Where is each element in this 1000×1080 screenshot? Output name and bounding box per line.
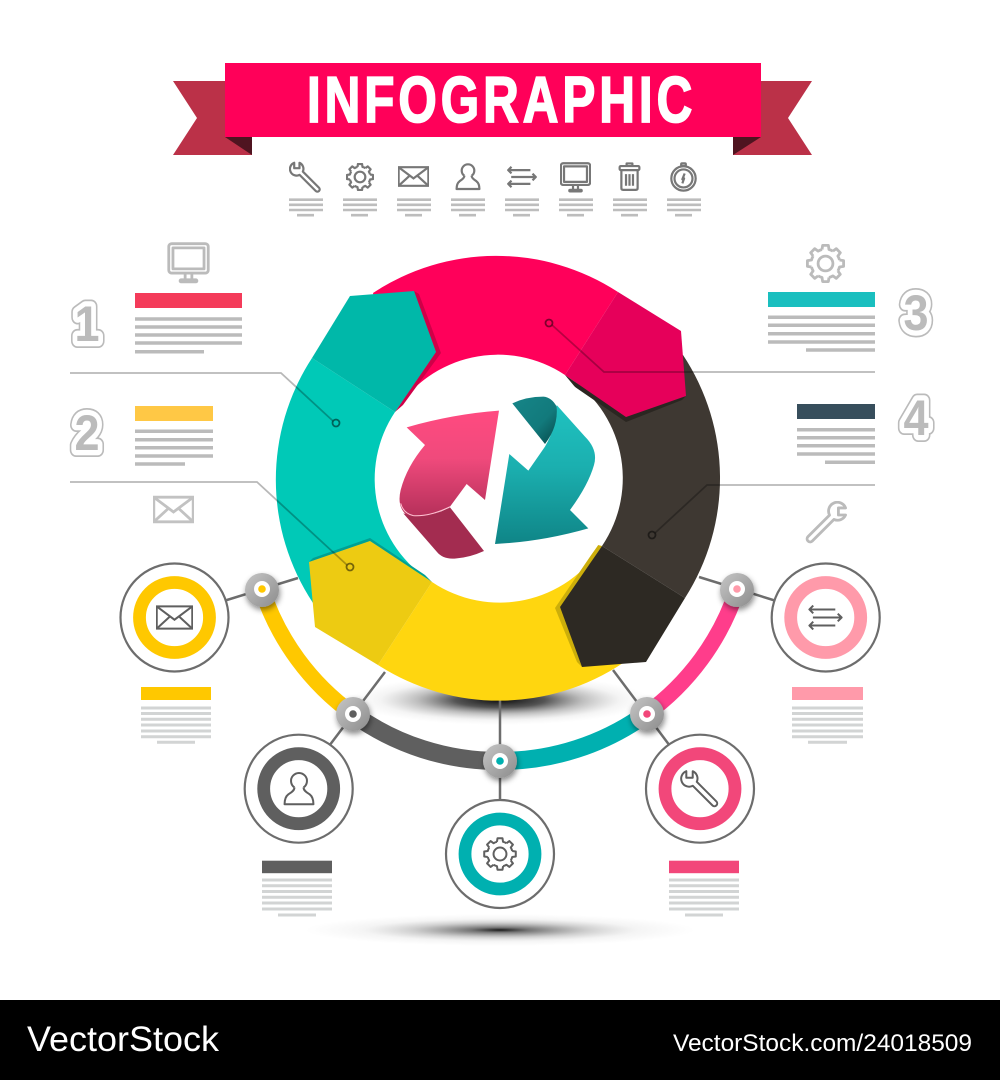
ribbon left tail xyxy=(173,81,252,155)
circle: person xyxy=(245,735,353,843)
inner white disc xyxy=(378,359,618,599)
progress arc xyxy=(262,590,737,761)
station: gray xyxy=(336,697,370,731)
segment: pink body xyxy=(373,256,618,412)
arrowhead: yellow xyxy=(309,541,432,665)
leader lines xyxy=(70,320,875,570)
station: light pink xyxy=(720,573,754,607)
leader dots xyxy=(332,320,656,570)
center arrows icon xyxy=(400,397,595,559)
icon: envelope xyxy=(399,167,428,186)
numeral 4: 4 xyxy=(903,391,929,447)
text block 1 xyxy=(135,293,242,352)
ribbon right fold xyxy=(733,137,761,155)
ribbon main band xyxy=(225,63,761,137)
numeral 3: 3 xyxy=(903,286,929,342)
leader 4 xyxy=(655,485,875,533)
numeral 1: 1 xyxy=(74,297,100,353)
icon: gear, block 3 xyxy=(807,245,844,282)
main cycle ring xyxy=(276,256,720,701)
pink arrow side xyxy=(403,507,484,559)
circle: wrench xyxy=(646,735,754,843)
footer logo text: VectorStock xyxy=(27,1020,220,1059)
leader 2 xyxy=(70,482,347,565)
arc: yellow xyxy=(262,590,353,714)
icon: monitor xyxy=(561,163,590,191)
pink arrow highlight xyxy=(401,503,450,516)
circle: arrows xyxy=(772,564,880,672)
circle: envelope xyxy=(120,564,228,672)
station: yellow xyxy=(245,573,279,607)
ribbon left fold xyxy=(225,137,252,155)
icon: person xyxy=(457,164,479,189)
numeral 3: 3 xyxy=(903,286,929,342)
icon: stopwatch xyxy=(671,163,696,191)
station: pink xyxy=(630,697,664,731)
caption: person xyxy=(262,861,332,915)
numeral 4: 4 xyxy=(903,391,929,447)
pink arrow front xyxy=(400,411,499,516)
numeral 2: 2 xyxy=(74,406,100,462)
station: teal xyxy=(483,744,517,778)
circle: gear xyxy=(446,800,554,908)
title: INFOGRAPHIC xyxy=(307,65,696,137)
caption: envelope xyxy=(141,687,211,742)
arc: pink xyxy=(646,590,737,714)
numeral 2: 2 xyxy=(74,406,100,462)
shadow under main ring xyxy=(350,675,650,725)
arrowhead: pink xyxy=(565,292,686,417)
pink head shadow xyxy=(565,375,686,422)
floor shadow xyxy=(305,914,695,946)
yellow head shadow xyxy=(309,538,432,582)
caption: arrows xyxy=(792,687,863,742)
teal arrow flap xyxy=(512,397,557,444)
icon: trash xyxy=(620,163,639,190)
leader 1 xyxy=(70,373,333,421)
stations on arc xyxy=(245,573,754,778)
numeral 4: 4 xyxy=(903,391,929,447)
numeral 1: 1 xyxy=(74,297,100,353)
text block 4 xyxy=(797,404,875,462)
icon: wrench xyxy=(287,159,324,196)
ribbon title banner xyxy=(173,63,812,155)
arc: teal xyxy=(500,714,646,761)
icon: gear xyxy=(347,164,373,190)
numeral 2: 2 xyxy=(74,406,100,462)
dark head shadow xyxy=(555,545,602,667)
teal arrow front xyxy=(495,405,595,544)
footer bar xyxy=(0,1000,1000,1080)
caption: wrench xyxy=(669,861,739,915)
segment: yellow body xyxy=(378,546,623,701)
icon: monitor, block 1 xyxy=(169,244,208,282)
numeral 3: 3 xyxy=(903,286,929,342)
text block 3 xyxy=(768,292,875,350)
teal head shadow xyxy=(395,291,441,412)
arrowhead: teal xyxy=(312,291,436,412)
segment: teal body xyxy=(276,358,432,603)
footer url text: VectorStock.com/24018509 xyxy=(673,1030,972,1057)
text block 2 xyxy=(135,406,213,464)
arc: gray xyxy=(353,714,500,761)
ribbon right tail xyxy=(733,81,812,155)
top icon captions xyxy=(289,200,701,215)
icon: arrows xyxy=(508,167,536,187)
icon: envelope, block 2 xyxy=(154,497,193,522)
arrowhead: dark xyxy=(560,546,685,667)
segment: dark body xyxy=(565,355,720,598)
top icon row xyxy=(287,159,696,196)
leader 3 xyxy=(552,325,875,372)
icon: wrench, block 4 xyxy=(801,499,850,547)
connectors to circles xyxy=(214,577,786,813)
numeral 1: 1 xyxy=(74,297,100,353)
